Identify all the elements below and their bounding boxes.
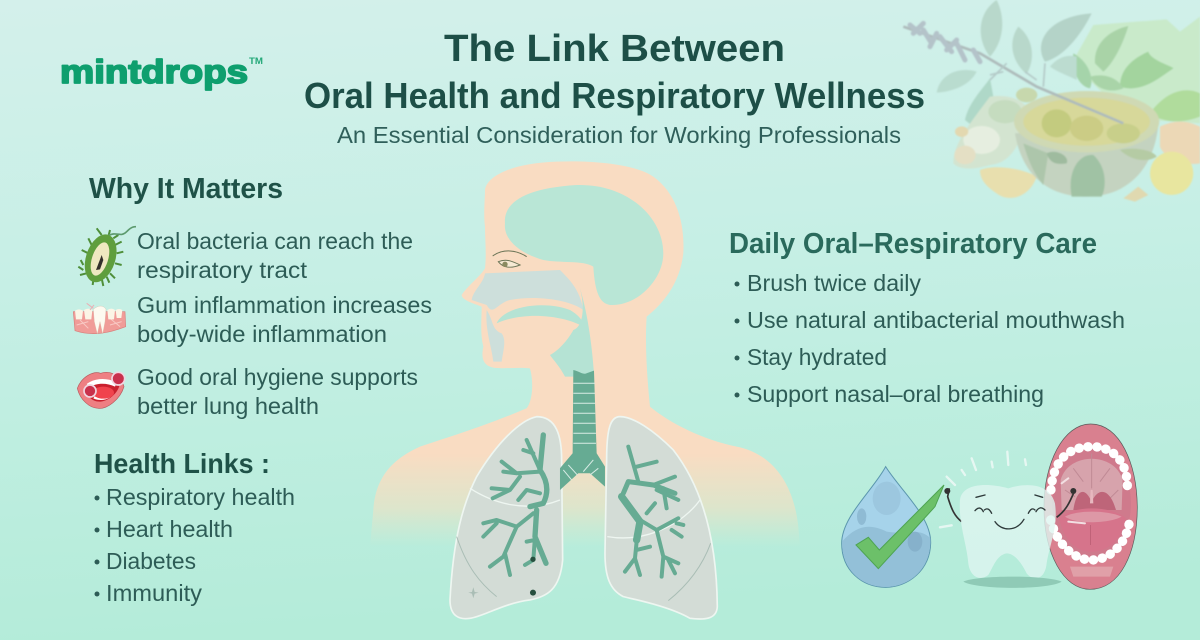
trachea [560,370,605,490]
trademark mark: TM [249,56,263,66]
icon: inflamed gum [73,303,126,334]
main title line 1: The Link Between [444,28,785,70]
text: bacteria: Oral bacteria can reach the [137,228,413,254]
list: daily care: Support nasal–oral breathing [747,381,1044,407]
right bronchial tree [622,447,683,577]
text: gum inflammation [137,292,432,347]
lung lobe lines [457,488,711,601]
main title line 2: Oral Health and Respiratory Wellness [304,75,925,116]
panel: daily oral-respiratory care [729,228,1125,407]
list: health links: Immunity [106,580,203,606]
list: daily care [734,270,1125,407]
icon: mouth with lesions [77,372,125,408]
heading: why it matters: Why It Matters [89,173,283,205]
right lung [605,417,717,619]
text: oral hygiene: Good oral hygiene supports [137,364,418,390]
list: health links: Diabetes [106,548,196,574]
text: oral hygiene: better lung health [137,393,319,419]
heading: health links: Health Links : [94,448,270,479]
list: daily care: Stay hydrated [747,344,887,370]
text: gum inflammation: Gum inflammation increases [137,292,432,318]
icon: open mouth [1044,424,1137,589]
panel: health links [94,448,295,606]
panel: why it matters [73,173,432,419]
brand logo [60,53,263,90]
left lung [450,417,563,619]
lung markers [468,557,536,598]
list: daily care: Brush twice daily [747,270,921,296]
list: health links: Respiratory health [106,484,295,510]
icon: water drop with check [842,467,944,587]
body silhouette [370,161,800,547]
brain cavity [505,185,663,305]
subtitle: An Essential Consideration for Working Professionals [337,122,901,148]
nasal cavity [472,270,583,310]
list: health links [94,484,295,606]
illustration: human respiratory system [370,161,800,619]
logo wordmark: mintdrops [60,53,248,90]
eye [493,251,527,267]
icon: smiling tooth [940,452,1076,588]
text: bacteria [137,228,413,283]
left bronchial tree [483,435,547,575]
text: bacteria: respiratory tract [137,257,308,283]
heading: daily care: Daily Oral–Respiratory Care [729,228,1097,260]
illustration: herbs and bowl [903,0,1200,202]
title block [304,28,925,148]
icon: bacterium [78,227,136,286]
oral cavity and throat [497,288,594,377]
lips and jaw shading [486,310,504,362]
text: oral hygiene [137,364,418,419]
list: health links: Heart health [106,516,233,542]
text: gum inflammation: body-wide inflammation [137,321,387,347]
list: daily care: Use natural antibacterial mouthwash [747,307,1125,333]
illustration: water drop, tooth and open mouth [842,424,1137,589]
